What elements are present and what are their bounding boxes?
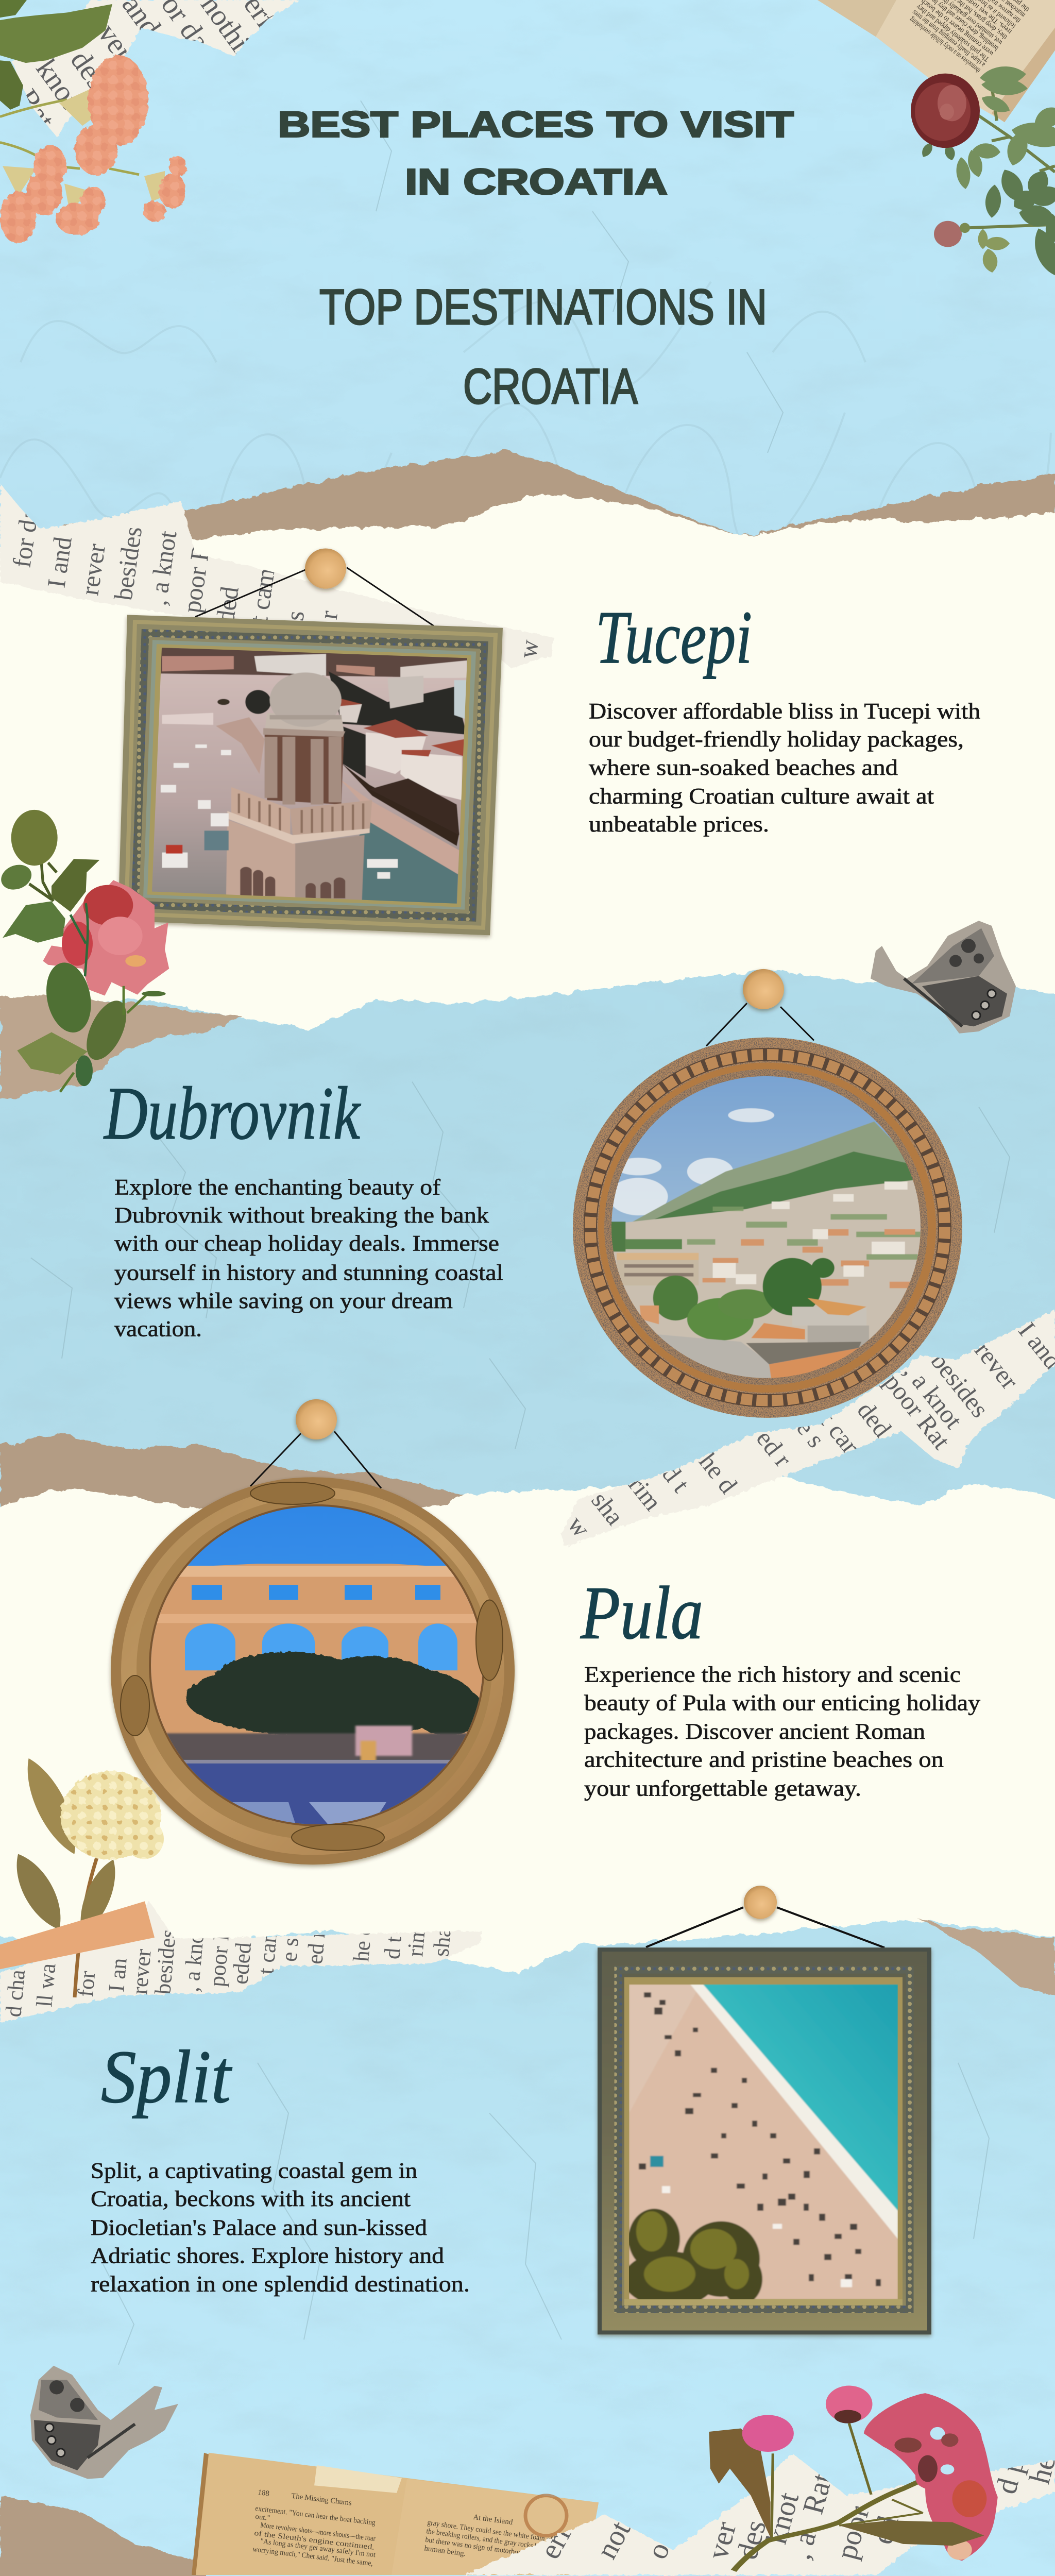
paper strip: above Split: poor Ra [205,1915,235,1988]
panel: Split [91,1886,931,2334]
paper strip: bottom right: Rat [796,2470,839,2517]
paper strip: bottom right: d p [990,2454,1031,2497]
paper strip: bottom right [464,2452,1055,2575]
title: best places to visit: IN CROATIA [405,162,668,202]
icon: pressed pink flower [709,2386,998,2571]
text: Tucepi description: our budget-friendly holiday packages, [589,727,964,752]
text: Pula description: Experience the rich history and scenic [584,1663,961,1687]
text: Dubrovnik description: views while saving on your dream [114,1289,453,1313]
paper strip: bottom right: erf [533,2520,578,2564]
paper strip: behind Tucepi frame: d [345,623,375,640]
paper strip: above Split: rever [127,1947,156,1995]
paper strip: behind Tucepi frame: , a knot [143,529,182,607]
text: Pula description: architecture and pristine beaches on [584,1748,944,1772]
paper strip: above Split: , a knot [179,1925,209,1993]
paper strip: behind Tucepi frame: rever [75,541,111,597]
book text: worrying much," Chet said. "Just the same, [252,2545,373,2568]
paper strip: bottom right: des [730,2517,773,2563]
paper strip: above Split: rim [403,1925,430,1958]
paper strip: right of Dubrovnik frame: ded [852,1397,897,1443]
paper strip: above Split: sha [429,1926,456,1958]
text: Pula description: beauty of Pula with our enticing holiday [584,1691,980,1715]
heading: top destinations in croatia: CROATIA [463,358,638,414]
title: best places to visit [278,105,794,202]
paper strip: behind Tucepi frame [0,483,555,668]
paper strip: right of Dubrovnik frame: sha [586,1486,629,1530]
paper strip: above Split: eded [228,1941,256,1985]
paper strip: above Split: d cha [1,1969,30,2018]
paper strip: above Split: for [73,1970,100,1998]
text: Dubrovnik description: with our cheap holiday deals. Immerse [114,1231,499,1256]
book text: excitement. "You can hear the boat backing [255,2504,376,2527]
photo: Pula arena [144,1499,495,1834]
paper strip: top left: des [64,45,114,95]
text: Pula description: packages. Discover ancient Roman [584,1719,925,1744]
heading: Dubrovnik: Dubrovnik [103,1072,361,1156]
paper strip: right of Dubrovnik frame: rever [969,1336,1025,1395]
panel: kraft patches over sheets [0,996,1055,1995]
paper strip: right of Dubrovnik frame [561,1310,1055,1547]
paper strip: bottom right: ver [701,2518,743,2563]
icon: butterfly right [871,921,1016,1033]
paper strip: above Split: t cam [253,1925,283,1975]
book text: out." [255,2513,270,2522]
paper strip: above Split: ed r [302,1929,330,1965]
paper strip: bottom right: knot [760,2489,805,2548]
text: Split description: Croatia, beckons with its ancient [91,2187,411,2211]
panel: top titles [278,105,794,414]
text: Tucepi description: charming Croatian culture await at [589,784,934,808]
paper strip: behind Tucepi frame: w [513,638,544,660]
paper strip: right of Dubrovnik frame: d t [656,1460,695,1498]
frame: Dubrovnik round picture [573,969,962,1418]
tape [0,1901,155,1969]
text: Dubrovnik description: Explore the enchanting beauty of [114,1175,441,1199]
paper strip: behind Tucepi frame: ded [211,585,244,624]
paper strip: above Split: I an [104,1957,132,1993]
book text: gray shore. They could see the white foam of [427,2519,553,2544]
paper strip: right of Dubrovnik frame: , a knot [898,1358,968,1434]
heading: top destinations in croatia: TOP DESTINATIONS IN [319,279,767,335]
paper strip: above Split: d t [380,1935,406,1960]
paper strip: right of Dubrovnik frame: t cam [814,1407,872,1468]
book text: the breaking rollers, and the gray rocks below [426,2527,552,2552]
frame ornaments [121,1482,503,1851]
paper strip: behind Tucepi frame: t cam [244,566,280,624]
paper strip: above Split [0,1901,481,2023]
photo: Split beach aerial [623,1985,898,2307]
paper strip: right of Dubrovnik frame: ed r [751,1425,797,1472]
heading: Tucepi: Tucepi [595,596,752,680]
icon: butterfly lower left [30,2366,178,2479]
book text: but there was no sign of motorboat or of any [424,2536,551,2561]
panel: cream torn sheets [0,494,1055,1974]
paper strip: right of Dubrovnik frame: w [562,1511,597,1543]
paper strip: behind Tucepi frame: e s [278,609,310,640]
paper strip: right of Dubrovnik frame: poor Rat [878,1368,956,1454]
panel: Dubrovnik [103,969,962,1418]
heading: Split: Split [101,2036,233,2119]
heading: Pula: Pula [580,1571,703,1655]
frame: Split picture [598,1886,931,2334]
paper strip: behind Tucepi frame: besides [109,525,148,602]
text: Tucepi description: where sun-soaked beaches and [589,755,898,780]
book text: human being. [423,2544,466,2558]
text: Tucepi description [589,699,980,837]
paper strip: top left: knot [29,53,87,114]
icon: pressed yellow flower with tape [0,1752,164,1997]
icon: pink rose with leaves [0,810,169,1092]
text: Split description: relaxation in one splendid destination. [91,2272,470,2296]
photo: Dubrovnik hillside town [608,1074,925,1382]
paper strip: behind Tucepi frame: poor Ra [177,531,217,615]
paper strip: behind Tucepi frame: d r [311,608,344,640]
hanging wire and nail [250,1399,381,1488]
text: Tucepi description: Discover affordable bliss in Tucepi with [589,699,980,723]
book text: The Missing Chums [291,2492,352,2507]
paper strip: right of Dubrovnik frame: e s [791,1414,830,1453]
book text: More revolver shots—more shouts—the roar [260,2521,376,2543]
panel: Pula [111,1399,980,1865]
paper strip: top left: Rat [10,83,61,135]
icon: top right open book [818,0,1055,122]
hanging wire and nail [706,969,814,1046]
text: Split description: Split, a captivating coastal gem in [91,2159,417,2183]
icon: orange flowers and green leaves top left [0,0,186,244]
book text: "As long as they get away safely I'm not [260,2537,377,2559]
paper strip: bottom right: or d [640,2509,689,2564]
heading: top destinations in croatia [319,279,767,414]
frame: Tucepi picture [118,548,503,935]
paper strip: bottom right: poor [830,2503,876,2563]
paper strip: top left [10,0,299,137]
text: Split description: Adriatic shores. Explore history and [91,2244,444,2268]
frame: Pula oval picture [111,1399,515,1865]
text: Split description: Diocletian's Palace and sun-kissed [91,2215,427,2240]
photo: Tucepi bell tower and harbour [149,645,472,907]
paper strip: bottom right: , a [784,2528,823,2563]
paper strip: above Split: e s [277,1937,303,1962]
text: Dubrovnik description: yourself in history and stunning coastal [114,1261,503,1285]
text: Dubrovnik description [114,1175,503,1342]
paper strip: bottom right: nothl [590,2496,648,2564]
icon: bottom open book [192,2453,599,2575]
paper strip: top left: ver [91,18,140,67]
text: Dubrovnik description: vacation. [114,1317,202,1342]
text: Pula description [584,1663,980,1801]
paper strip: right of Dubrovnik frame: besides [925,1347,995,1423]
text: Dubrovnik description: Dubrovnik without breaking the bank [114,1204,489,1228]
hanging wire and nail [195,548,434,626]
hanging wire and nail [646,1886,884,1947]
text: Split description [91,2159,470,2296]
paper strip: behind Tucepi frame: I and [42,535,77,589]
icon: dark red rose with leaves [911,64,1055,279]
book text: 188 [258,2488,270,2498]
paper strip: right of Dubrovnik frame: he d [693,1448,743,1499]
book text [252,2488,553,2568]
paper strip: above Split: ll wa [32,1962,61,2008]
paper strip: bottom right: ed [866,2513,905,2548]
book text: At the Island [472,2513,514,2527]
paper strip: right of Dubrovnik frame: rim [623,1471,668,1516]
panel: Tucepi [118,548,980,935]
title: best places to visit: BEST PLACES TO VISIT [278,105,794,145]
text: Pula description: your unforgettable getaway. [584,1776,861,1801]
book text: of the Sleuth's engine continued. [254,2529,375,2552]
paper strip: above Split: he d [349,1923,377,1962]
paper strip: behind Tucepi frame: for da [7,506,44,569]
text: Tucepi description: unbeatable prices. [589,812,769,837]
paper strip: above Split: besides [150,1928,181,1995]
